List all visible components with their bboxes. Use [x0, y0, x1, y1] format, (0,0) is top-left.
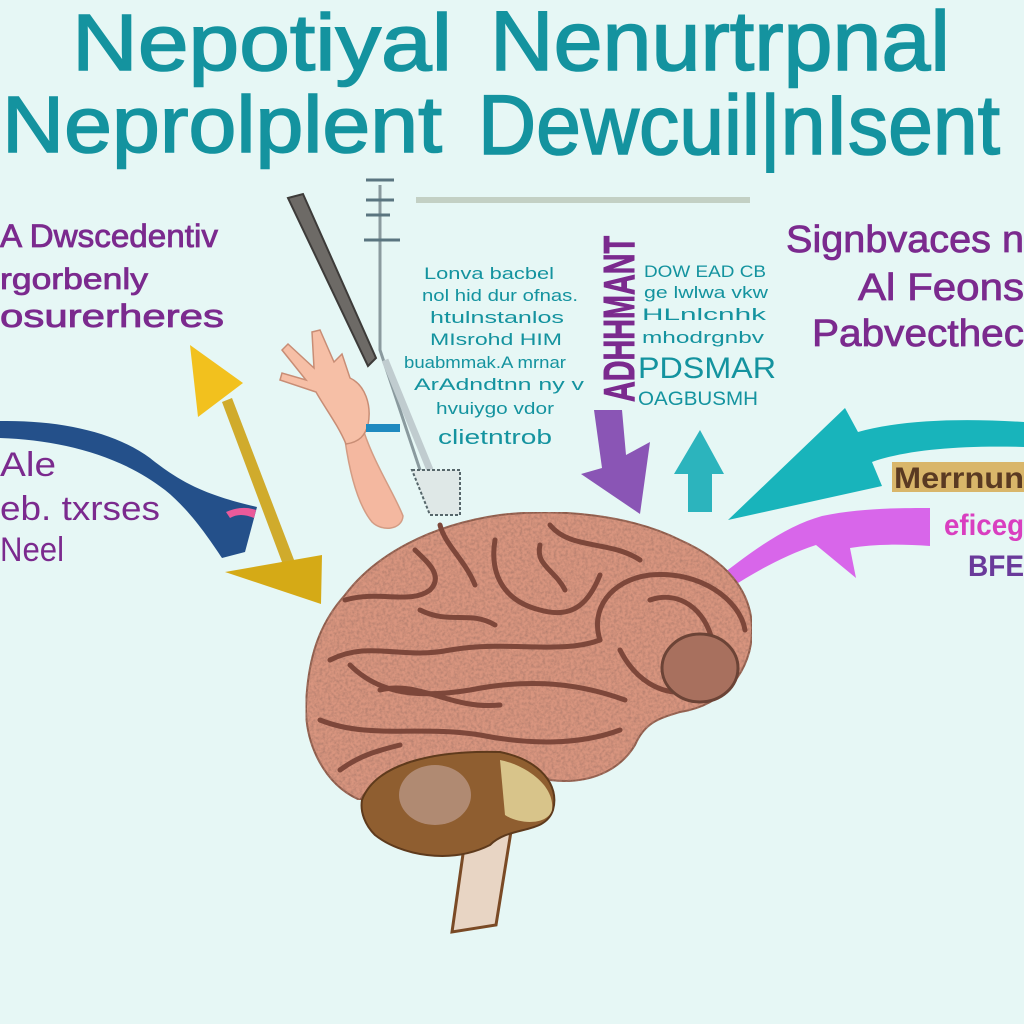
- right center text column: DOW EAD CB: [644, 262, 766, 281]
- purple down arrow: [581, 410, 650, 514]
- left text block: rgorbenly: [0, 263, 148, 296]
- right text block: Pabvecthec: [812, 313, 1024, 355]
- brain folds: [320, 525, 745, 770]
- yellow double arrow: [190, 345, 322, 604]
- left text block: A Dwscedentiv: [0, 218, 218, 254]
- title: [2, 0, 1000, 172]
- center text column: ArAdndtnn ny v: [414, 375, 585, 394]
- left lower text block: [0, 446, 160, 569]
- teal up arrow: [674, 430, 724, 512]
- cerebellum: [362, 752, 554, 856]
- center text column: [404, 264, 585, 449]
- left lower text block: Neel: [0, 531, 64, 569]
- title: Neprolplent: [2, 80, 442, 169]
- center text column: nol hid dur ofnas.: [422, 286, 578, 305]
- right text block: Al Feons: [858, 267, 1024, 309]
- left text block: osurerheres: [0, 298, 224, 334]
- right center text column: HLnlcnhk: [642, 305, 767, 324]
- right text block: [786, 219, 1024, 355]
- center text column: htulnstanlos: [430, 308, 564, 327]
- title: Dewcuil|nIsent: [478, 78, 1000, 172]
- vertical purple label: ADHHMANT: [595, 236, 644, 402]
- icon: syringe instrument: [288, 180, 460, 515]
- brain: [306, 512, 752, 800]
- icon: hand and arm: [280, 330, 403, 528]
- left lower text block: Ale: [0, 446, 56, 484]
- small magenta labels: [944, 509, 1024, 583]
- right center text column: ge lwlwa vkw: [644, 283, 769, 302]
- center text column: hvuiygo vdor: [436, 399, 554, 418]
- brain dark eye-like fold: [662, 634, 738, 702]
- brainstem: [452, 825, 512, 932]
- small orange label: Merrnun: [894, 462, 1024, 495]
- center text column: MIsrohd HIM: [430, 330, 562, 349]
- left text block: [0, 218, 224, 334]
- divider line: [416, 197, 750, 203]
- magenta curved arrow: [724, 508, 930, 588]
- dark blue curved arrow: [0, 421, 257, 558]
- right center text column: PDSMAR: [638, 352, 776, 385]
- center text column: Lonva bacbel: [424, 264, 554, 283]
- left lower text block: eb. txrses: [0, 490, 160, 528]
- center text column: clietntrob: [438, 427, 552, 449]
- right center text column: mhodrgnbv: [642, 328, 765, 347]
- right center text column: OAGBUSMH: [638, 389, 758, 410]
- right center text column: [638, 262, 776, 410]
- title: Nepotiyal: [72, 0, 452, 87]
- center text column: buabmmak.A mrnar: [404, 353, 566, 372]
- teal curved arrow: [728, 408, 1024, 520]
- right text block: Signbvaces n: [786, 219, 1024, 261]
